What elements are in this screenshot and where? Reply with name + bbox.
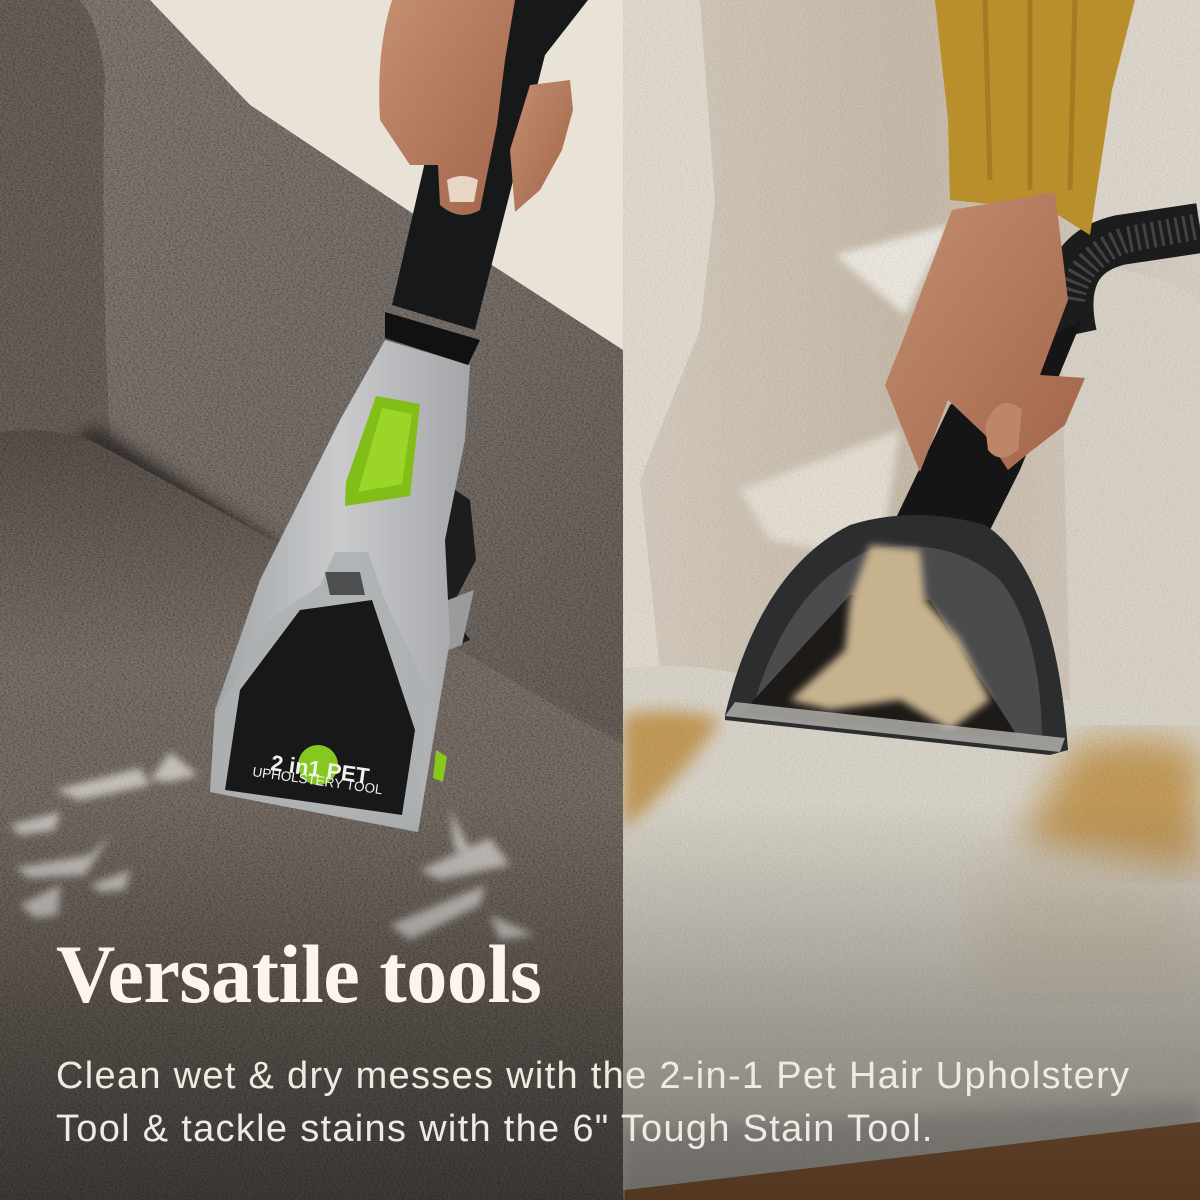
panel: chair with stain tool bbox=[623, 0, 1200, 1200]
body text bbox=[56, 1055, 1130, 1150]
stain tool bbox=[725, 515, 1068, 755]
wand bbox=[392, 0, 588, 330]
dark bottom gradient bbox=[0, 800, 1200, 1200]
title: Versatile tools bbox=[56, 929, 541, 1020]
thumb right bbox=[985, 403, 1022, 458]
tool label: 2 in1 PET bbox=[269, 750, 371, 789]
chair seat bbox=[623, 666, 1200, 1190]
pet hair tool bbox=[210, 312, 480, 832]
panel: sofa with pet hair tool bbox=[0, 0, 623, 1200]
tool label bbox=[252, 745, 384, 797]
pet hair left bbox=[10, 752, 198, 918]
thumbnail left bbox=[447, 176, 478, 202]
fingers left bbox=[510, 80, 573, 212]
handle bbox=[897, 334, 1076, 529]
pet hair right bbox=[390, 810, 535, 940]
hand and thumb left bbox=[379, 0, 515, 215]
hose bbox=[1068, 228, 1200, 335]
hand right bbox=[885, 192, 1085, 472]
sleeve bbox=[935, 0, 1135, 235]
tool label: UPHOLSTERY TOOL bbox=[252, 764, 384, 797]
body text: Clean wet & dry messes with the 2-in-1 Pet Hair Upholstery bbox=[56, 1055, 1130, 1097]
body text: Tool & tackle stains with the 6" Tough Stain Tool. bbox=[56, 1108, 934, 1150]
stains bbox=[623, 711, 720, 830]
wet dry switch bbox=[345, 396, 420, 506]
wood base bbox=[625, 1122, 1200, 1200]
